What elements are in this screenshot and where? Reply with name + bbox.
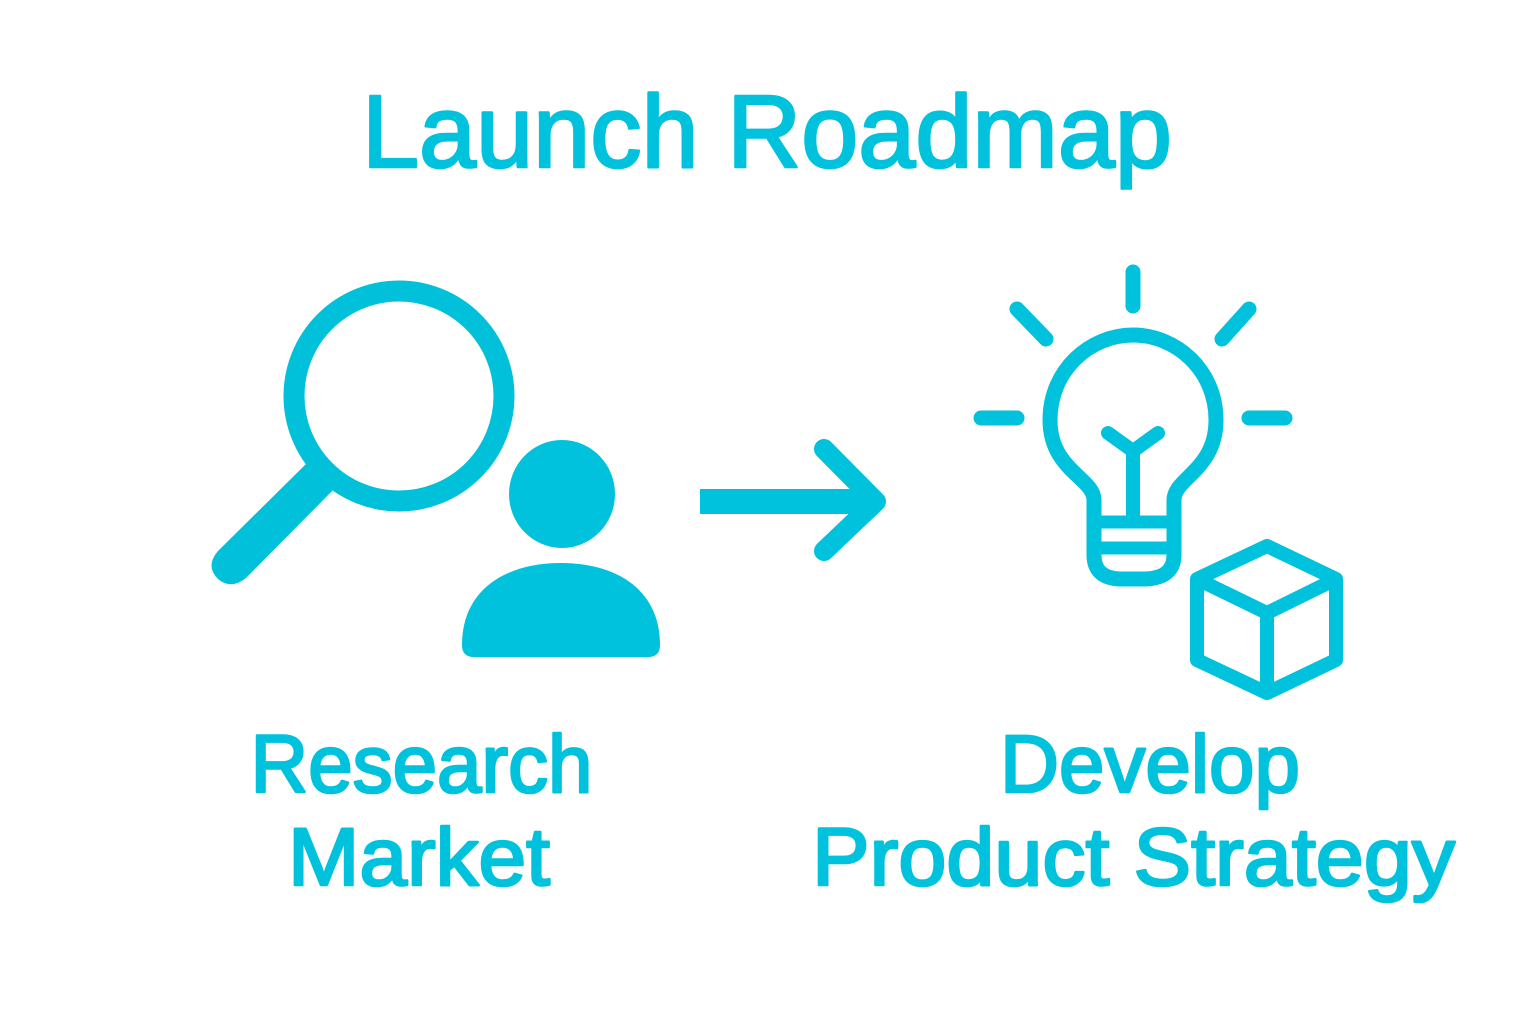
title: Launch Roadmap bbox=[362, 74, 1172, 189]
icon: box bbox=[1197, 546, 1336, 693]
icon: magnifying glass bbox=[212, 291, 504, 584]
icon: person bbox=[462, 440, 660, 657]
icon: light bulb bbox=[981, 272, 1285, 579]
arrow bbox=[700, 449, 876, 551]
label: develop product strategy: Product Strategy bbox=[812, 812, 1455, 903]
label: research market: Research bbox=[250, 719, 592, 810]
label: develop product strategy: Develop bbox=[1000, 719, 1300, 810]
label: develop product strategy bbox=[812, 719, 1455, 903]
label: research market: Market bbox=[288, 812, 550, 903]
label: research market bbox=[250, 719, 592, 903]
